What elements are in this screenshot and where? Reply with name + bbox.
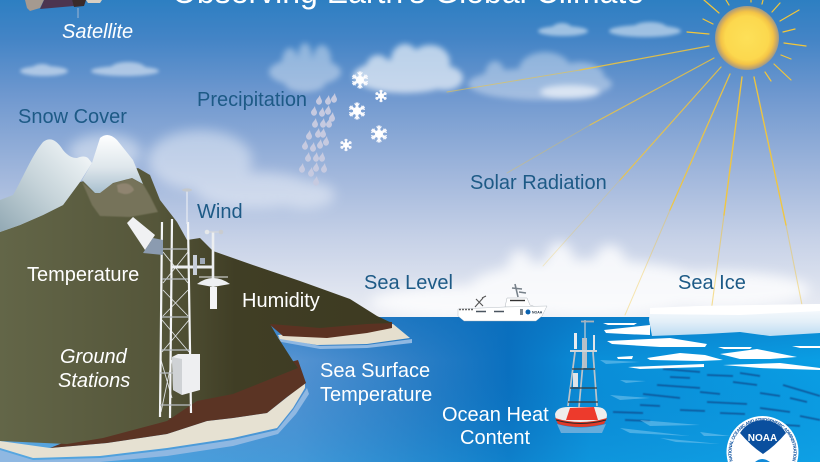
ocean surface ripples [613,369,820,426]
label: sea ice: Sea Ice [678,272,746,294]
sky background [0,0,820,318]
label: precipitation: Precipitation [197,89,307,111]
label: sea surface temperature: Temperature [320,384,432,406]
sensor arm [172,266,213,268]
sea ice shelf and floes [603,304,820,370]
precipitation: raindrops [299,93,337,186]
radiation shield [197,278,230,287]
brown rock patch [82,178,158,217]
crossbraces [161,252,189,412]
label: humidity: Humidity [242,290,320,312]
lower beach [0,383,305,458]
anemometer [212,232,214,283]
label: ocean heat content: Content [460,427,530,449]
snow peak left [0,139,92,232]
shallow water edge [276,337,412,349]
back hill sand spit [278,324,410,345]
label: sea surface temperature: Sea Surface [320,360,430,382]
label: wind: Wind [197,201,243,223]
small sensors [193,255,197,275]
mast [186,190,188,224]
horizontal bands [160,249,191,405]
research ship: NOAA [532,310,543,314]
satellite [25,0,102,18]
weather station tower [127,188,230,418]
label: ground stations: Stations [58,370,130,392]
label: temperature: Temperature [27,264,139,286]
ocean buoy [555,320,607,433]
NOAA logo: NOAA [748,433,777,444]
research ship [458,284,547,321]
label: sea level: Sea Level [364,272,453,294]
label: satellite: Satellite [62,21,133,43]
label: ocean heat content: Ocean Heat [442,404,549,426]
NOAA logo: NATIONAL OCEANIC AND ATMOSPHERIC ADMINISTRATION [728,418,797,462]
lower brown soil [50,360,306,448]
label: ground stations: Ground [60,346,128,368]
label: snow cover: Snow Cover [18,106,127,128]
clouds [20,22,810,318]
precipitation: snowflakes [340,72,387,151]
tower legs [160,219,191,418]
back hill brown edge [262,318,392,338]
ocean [0,317,820,462]
island with mountain and beach [0,135,412,462]
green land [0,168,392,444]
label: solar radiation: Solar Radiation [470,172,607,194]
snow peak right [82,135,143,193]
sun with rays [447,0,806,335]
camera sensor [127,217,155,250]
enclosure box [172,354,200,395]
